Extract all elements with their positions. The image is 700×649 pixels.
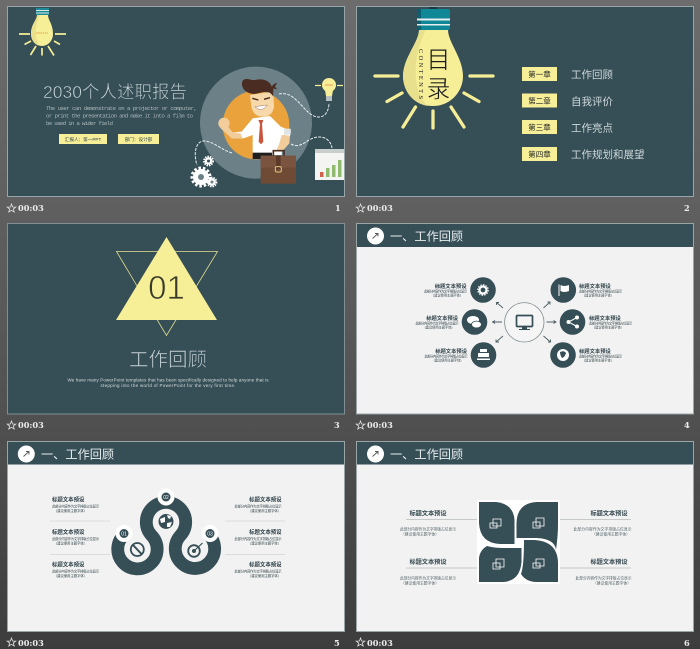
text column: left bbox=[52, 496, 100, 578]
panel: slide 3 section bbox=[7, 224, 344, 430]
panel: slide 5 curve bbox=[7, 442, 344, 648]
footer: slide 6: 00:03 bbox=[367, 638, 393, 648]
node: flag bbox=[550, 277, 622, 303]
text block bbox=[68, 378, 269, 388]
header bar: 一、工作回顾 bbox=[41, 448, 114, 462]
connector lines bbox=[406, 520, 631, 568]
text: bottom left: 此部分内容作为文字排版占位显示 bbox=[400, 576, 456, 580]
icon: large bulb bbox=[375, 7, 493, 128]
node: stamp: （建议使用主题字体） bbox=[432, 358, 464, 362]
node: globe: 此部分内容作为文字排版占位显示 bbox=[579, 354, 622, 358]
footer: slide 4: 4 bbox=[684, 420, 690, 430]
marker 02: 02 bbox=[163, 495, 169, 501]
curve diagram bbox=[116, 488, 218, 569]
text block: intro: The user can demonstrate on a projector or computer, bbox=[46, 105, 197, 112]
list: chapter items: 工作亮点 bbox=[571, 122, 613, 134]
footer: slide 6 bbox=[356, 638, 690, 648]
text: top right: 标题文本预设 bbox=[590, 510, 628, 518]
petal: top right bbox=[516, 502, 558, 550]
text block: intro bbox=[46, 105, 197, 127]
node: share bbox=[560, 309, 632, 335]
tag: reporter bbox=[59, 134, 107, 144]
node: globe bbox=[550, 342, 622, 368]
node: chat bbox=[416, 309, 487, 335]
marker 03: 03 bbox=[207, 532, 213, 538]
number: 01 bbox=[148, 269, 185, 306]
tag: department: 部门：设计部 bbox=[125, 136, 153, 143]
footer: slide 5: 00:03 bbox=[18, 638, 44, 648]
footer: slide 2 bbox=[356, 203, 690, 213]
footer: slide 4: 00:03 bbox=[367, 420, 393, 430]
tag: reporter: 汇报人：第一PPT bbox=[65, 136, 101, 143]
text column: right: （建议使用主题字体） bbox=[248, 573, 281, 578]
text block: intro: or print the presentation and make it into a film to bbox=[46, 112, 194, 120]
panel: slide 1 cover bbox=[7, 6, 344, 213]
heading: contents: 录 bbox=[426, 76, 450, 103]
footer: slide 4 bbox=[356, 420, 690, 430]
node: gear: （建议使用主题字体） bbox=[431, 292, 463, 298]
icon: small bulb bbox=[315, 78, 343, 101]
node: globe: （建议使用主题字体） bbox=[582, 358, 614, 362]
text: bottom right: 标题文本预设 bbox=[590, 558, 628, 566]
text column: right: 标题文本预设 bbox=[249, 528, 282, 536]
text column: right: 此部分内容作为文字排版占位显示 bbox=[234, 504, 282, 508]
text: top right: 此部分内容作为文字排版占位显示 bbox=[574, 526, 632, 532]
text: bottom right: 此部分内容作为文字排版占位显示 bbox=[576, 576, 632, 580]
header bar: 一、工作回顾 bbox=[390, 230, 463, 244]
node: flag: 标题文本预设 bbox=[579, 282, 611, 290]
arrows bbox=[492, 302, 556, 342]
node: stamp: 标题文本预设 bbox=[435, 347, 468, 355]
panel: slide 2 contents bbox=[356, 6, 694, 213]
panel: slide 6 petals bbox=[356, 442, 694, 648]
connector: dashed curves bbox=[195, 94, 332, 165]
icon: globe bbox=[158, 514, 174, 529]
footer: slide 1: 1 bbox=[335, 203, 341, 213]
title: 2030个人述职报告 bbox=[43, 82, 187, 102]
footer: slide 2: 00:03 bbox=[367, 203, 393, 213]
panel: slide 4 radial bbox=[356, 224, 694, 430]
text column: right: 此部分内容作为文字排版占位显示 bbox=[234, 536, 282, 541]
icon: compass bbox=[131, 543, 144, 556]
node: gear: 标题文本预设 bbox=[435, 282, 467, 290]
list: chapter items: 工作回顾 bbox=[571, 69, 613, 81]
header bar bbox=[8, 442, 344, 464]
node: gear: 此部分内容作为文字排版占位显示 bbox=[424, 288, 467, 294]
footer: slide 3: 00:03 bbox=[18, 420, 44, 430]
list: chapter items: 自我评价 bbox=[571, 95, 613, 108]
text: top right bbox=[574, 510, 632, 536]
footer: slide 1: 00:03 bbox=[18, 203, 44, 213]
text column: left: （建议使用主题字体） bbox=[54, 508, 87, 513]
dividers bbox=[50, 521, 285, 554]
text column: right: 标题文本预设 bbox=[249, 560, 282, 568]
list: chapter items: 第二章 bbox=[528, 96, 551, 106]
text column: left: 标题文本预设 bbox=[52, 560, 85, 568]
text: bottom left: 标题文本预设 bbox=[409, 558, 447, 566]
icon: light bulb bbox=[19, 8, 66, 56]
list: chapter items: 工作规划和展望 bbox=[571, 148, 644, 161]
footer: slide 2: 2 bbox=[684, 203, 690, 213]
node: chat: 此部分内容作为文字排版占位显示 bbox=[416, 320, 458, 326]
header bar bbox=[357, 224, 693, 247]
text column: left: 标题文本预设 bbox=[52, 528, 85, 536]
pinwheel diagram bbox=[477, 500, 560, 584]
node: stamp: 此部分内容作为文字排版占位显示 bbox=[424, 354, 468, 358]
text: bottom left: （建议使用主题字体） bbox=[401, 580, 439, 586]
footer: slide 3 bbox=[7, 420, 340, 430]
text column: right bbox=[234, 496, 282, 578]
list: chapter items bbox=[522, 67, 644, 161]
header bar: 一、工作回顾 bbox=[390, 448, 463, 462]
node: chat: （建议使用主题字体） bbox=[423, 324, 454, 330]
footer: slide 5 bbox=[7, 638, 340, 648]
list: chapter items: 第一章 bbox=[528, 69, 551, 79]
petal: top left bbox=[479, 502, 514, 544]
text: top left bbox=[400, 510, 456, 536]
heading: contents bbox=[417, 47, 450, 103]
text: bottom right: （建议使用主题字体） bbox=[593, 580, 631, 586]
tag: department bbox=[118, 134, 159, 144]
petal: bottom right bbox=[521, 540, 558, 582]
header bar bbox=[357, 442, 693, 464]
footer: slide 3: 3 bbox=[334, 420, 340, 430]
text column: left: 此部分内容作为文字排版占位显示 bbox=[52, 536, 100, 541]
text column: left: （建议使用主题字体） bbox=[54, 573, 87, 578]
node: chat: 标题文本预设 bbox=[426, 314, 459, 322]
heading: contents: 目 bbox=[426, 47, 450, 74]
text column: right: （建议使用主题字体） bbox=[248, 540, 281, 546]
text column: right: 标题文本预设 bbox=[249, 496, 282, 504]
icon: triangles bbox=[116, 237, 218, 336]
text column: right: （建议使用主题字体） bbox=[248, 508, 281, 513]
text: bottom right bbox=[576, 558, 632, 586]
text block: stepping into the world of PowerPoint for the very first time. bbox=[100, 383, 236, 388]
text column: left: 此部分内容作为文字排版占位显示 bbox=[52, 568, 100, 574]
node: share: （建议使用主题字体） bbox=[592, 324, 624, 330]
center monitor circle bbox=[505, 303, 544, 342]
text block: We have many PowerPoint templates that has been specifically designed to help anyone that is bbox=[68, 378, 269, 382]
text column: left: （建议使用主题字体） bbox=[54, 540, 87, 546]
text column: left: 标题文本预设 bbox=[52, 496, 85, 504]
node: flag: （建议使用主题字体） bbox=[582, 292, 614, 298]
icon: bar chart board bbox=[315, 149, 344, 180]
node: share: 标题文本预设 bbox=[589, 314, 621, 322]
icon: gears bbox=[192, 156, 216, 186]
text: top left: 此部分内容作为文字排版占位显示 bbox=[400, 526, 456, 532]
text: top left: （建议使用主题字体） bbox=[401, 532, 439, 536]
node: flag: 此部分内容作为文字排版占位显示 bbox=[579, 288, 622, 294]
text column: right: 此部分内容作为文字排版占位显示 bbox=[234, 568, 282, 574]
node: gear bbox=[424, 277, 496, 303]
illustration: businessman bbox=[200, 67, 312, 184]
footer: slide 5: 5 bbox=[334, 638, 340, 648]
list: chapter items: 第四章 bbox=[528, 149, 551, 159]
node: stamp bbox=[424, 342, 496, 368]
heading: 工作回顾 bbox=[129, 349, 207, 371]
text: bottom left bbox=[400, 558, 456, 586]
node: globe: 标题文本预设 bbox=[579, 347, 611, 355]
marker 01: 01 bbox=[121, 532, 127, 538]
footer: slide 6: 6 bbox=[684, 638, 690, 648]
list: chapter items: 第三章 bbox=[528, 122, 551, 132]
text: top left: 标题文本预设 bbox=[409, 510, 447, 518]
icon: target bbox=[188, 543, 202, 557]
text: top right: （建议使用主题字体） bbox=[592, 532, 630, 536]
node: share: 此部分内容作为文字排版占位显示 bbox=[589, 320, 632, 326]
petal: bottom left bbox=[479, 546, 522, 582]
text column: left: 此部分内容作为文字排版占位显示 bbox=[52, 504, 100, 508]
footer: slide 1 bbox=[7, 203, 341, 213]
text block: intro: be used in a wider field bbox=[46, 120, 113, 127]
heading: contents: CONTENTS bbox=[417, 49, 424, 99]
